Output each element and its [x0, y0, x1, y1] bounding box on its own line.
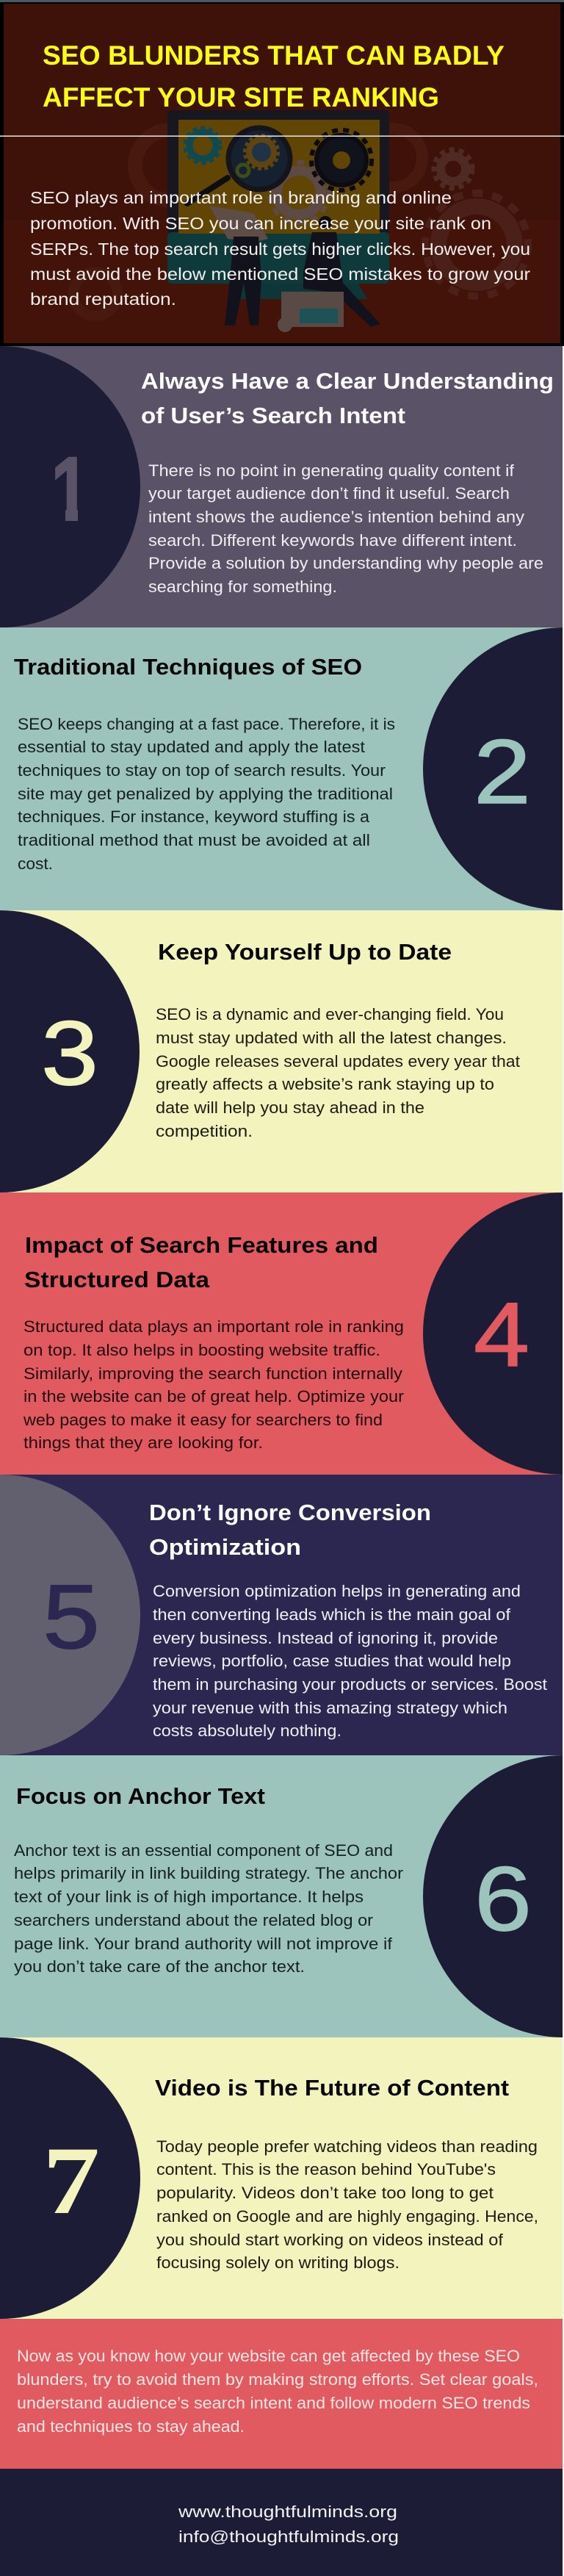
- title: SEO BLUNDERS THAT CAN BADLY: [43, 40, 505, 71]
- body 5: reviews, portfolio, case studies that would help: [153, 1652, 511, 1670]
- panel 6: anchor text: [0, 1755, 564, 2037]
- number circle 3: 3: [41, 1003, 98, 1104]
- panel 4: search features: [0, 1192, 564, 1475]
- body 5: your revenue with this amazing strategy which: [153, 1699, 507, 1717]
- body 3: Google releases several updates every year that: [156, 1052, 521, 1071]
- body 2: site may get penalized by applying the traditional: [18, 785, 393, 803]
- body 4: web pages to make it easy for searchers to find: [23, 1411, 383, 1429]
- intro text: [30, 188, 530, 309]
- body 3: competition.: [156, 1122, 253, 1140]
- heading 5: Optimization: [149, 1534, 301, 1560]
- heading 5: Don’t Ignore Conversion: [149, 1500, 431, 1525]
- closing text: blunders, try to avoid them by making strong efforts. Set clear goals,: [17, 2370, 538, 2389]
- illustration: SEO monitor with gears and people: [73, 110, 528, 332]
- body 1: search. Different keywords have different intent.: [148, 531, 517, 550]
- body 4: on top. It also helps in boosting website traffic.: [24, 1341, 380, 1359]
- body 1: Provide a solution by understanding why people are: [148, 554, 543, 572]
- body 5: every business. Instead of ignoring it, provide: [153, 1629, 498, 1647]
- footer contact: [0, 2469, 564, 2576]
- number circle 1: [0, 346, 140, 627]
- intro text: SEO plays an important role in branding and online: [30, 188, 452, 207]
- body 2: techniques. For instance, keyword stuffing is a: [18, 807, 370, 826]
- heading 6: Focus on Anchor Text: [16, 1783, 265, 1809]
- body 5: [153, 1582, 548, 1740]
- heading 1: [141, 368, 554, 428]
- body 5: Conversion optimization helps in generating and: [153, 1582, 521, 1600]
- contact text: www.thoughtfulminds.org: [178, 2503, 397, 2521]
- body 6: [14, 1841, 404, 1976]
- closing text: [17, 2347, 538, 2436]
- body 5: them in purchasing your products or services. Boost: [153, 1675, 548, 1694]
- divider line: [0, 135, 564, 137]
- body 4: Similarly, improving the search function internally: [24, 1364, 403, 1383]
- body 7: ranked on Google and are highly engaging. Hence,: [156, 2207, 538, 2226]
- panel 7: video: [0, 2037, 564, 2319]
- heading 1: Always Have a Clear Understanding: [141, 368, 554, 394]
- body 1: There is no point in generating quality content if: [148, 461, 515, 480]
- contact text: info@thoughtfulminds.org: [178, 2528, 399, 2546]
- body 6: helps primarily in link building strategy. The anchor: [14, 1864, 404, 1882]
- contact text: [178, 2503, 399, 2546]
- body 3: must stay updated with all the latest changes.: [156, 1029, 507, 1047]
- body 7: content. This is the reason behind YouTube's: [156, 2160, 496, 2179]
- heading 3: Keep Yourself Up to Date: [158, 939, 452, 965]
- number circle 7: [0, 2037, 140, 2319]
- heading 7: Video is The Future of Content: [155, 2075, 509, 2101]
- number circle 4: 4: [474, 1284, 529, 1386]
- closing text: Now as you know how your website can get affected by these SEO: [17, 2347, 520, 2365]
- body 1: [148, 461, 543, 596]
- body 4: Structured data plays an important role in ranking: [24, 1317, 404, 1336]
- body 6: searchers understand about the related blog or: [14, 1911, 374, 1929]
- panel 5: conversion optimization: [0, 1475, 564, 1755]
- body 7: popularity. Videos don’t take too long to get: [156, 2184, 494, 2202]
- body 2: cost.: [18, 855, 53, 873]
- body 3: greatly affects a website’s rank staying up to: [156, 1075, 494, 1093]
- closing panel: [0, 2319, 564, 2469]
- body 7: [156, 2137, 538, 2272]
- number circle 3: [0, 910, 140, 1192]
- body 6: page link. Your brand authority will not improve if: [14, 1935, 393, 1953]
- number circle 6: 6: [474, 1849, 532, 1950]
- panel 1: search intent: [0, 346, 564, 627]
- body 7: focusing solely on writing blogs.: [156, 2253, 400, 2272]
- body 1: searching for something.: [148, 578, 337, 596]
- body 4: [23, 1317, 405, 1452]
- number circle 4: [423, 1192, 564, 1475]
- body 6: text of your link is of high importance. It helps: [14, 1888, 364, 1906]
- number circle 5: 5: [43, 1566, 100, 1668]
- body 2: traditional method that must be avoided at all: [18, 831, 370, 849]
- body 1: your target audience don’t find it useful. Search: [148, 484, 510, 503]
- title: AFFECT YOUR SITE RANKING: [43, 82, 439, 112]
- number circle 2: [423, 627, 564, 910]
- body 3: date will help you stay ahead in the: [156, 1098, 424, 1117]
- heading 4: Structured Data: [24, 1267, 210, 1292]
- intro text: brand reputation.: [30, 289, 176, 309]
- body 2: techniques to stay on top of search results. Your: [18, 761, 386, 780]
- closing text: understand audience’s search intent and follow modern SEO trends: [17, 2394, 530, 2412]
- heading 4: Impact of Search Features and: [25, 1232, 378, 1258]
- body 1: intent shows the audience’s intention behind any: [148, 508, 525, 526]
- body 3: SEO is a dynamic and ever-changing field. You: [156, 1005, 504, 1023]
- body 7: you should start working on videos instead of: [156, 2231, 504, 2249]
- body 2: [18, 715, 395, 873]
- heading 1: of User’s Search Intent: [141, 403, 405, 428]
- body 4: in the website can be of great help. Optimize your: [24, 1387, 405, 1406]
- body 6: Anchor text is an essential component of SEO and: [14, 1841, 393, 1860]
- intro text: SERPs. The top search result gets higher clicks. However, you: [30, 240, 530, 259]
- title: [43, 40, 505, 112]
- number circle 2: 2: [474, 722, 531, 823]
- body 5: then converting leads which is the main goal of: [153, 1605, 511, 1624]
- body 2: essential to stay updated and apply the latest: [18, 738, 366, 756]
- body 5: costs absolutely nothing.: [153, 1721, 341, 1740]
- heading 2: Traditional Techniques of SEO: [14, 654, 362, 680]
- body 7: Today people prefer watching videos than reading: [156, 2137, 538, 2156]
- number circle 5: [0, 1475, 140, 1755]
- intro text: promotion. With SEO you can increase your site rank on: [30, 214, 491, 233]
- body 4: things that they are looking for.: [24, 1433, 263, 1452]
- body 3: [156, 1005, 521, 1140]
- hero panel: [0, 0, 564, 346]
- body 2: SEO keeps changing at a fast pace. Therefore, it is: [18, 715, 395, 733]
- heading 5: [149, 1500, 431, 1560]
- body 6: you don’t take care of the anchor text.: [14, 1957, 305, 1976]
- panel 2: traditional techniques: [0, 627, 564, 910]
- intro text: must avoid the below mentioned SEO mistakes to grow your: [30, 265, 530, 284]
- heading 4: [24, 1232, 378, 1292]
- closing text: and techniques to stay ahead.: [17, 2417, 245, 2436]
- number circle 6: [423, 1755, 564, 2037]
- panel 3: up to date: [0, 910, 564, 1192]
- number circle 1: 1: [50, 441, 91, 538]
- number circle 7: 7: [43, 2126, 100, 2234]
